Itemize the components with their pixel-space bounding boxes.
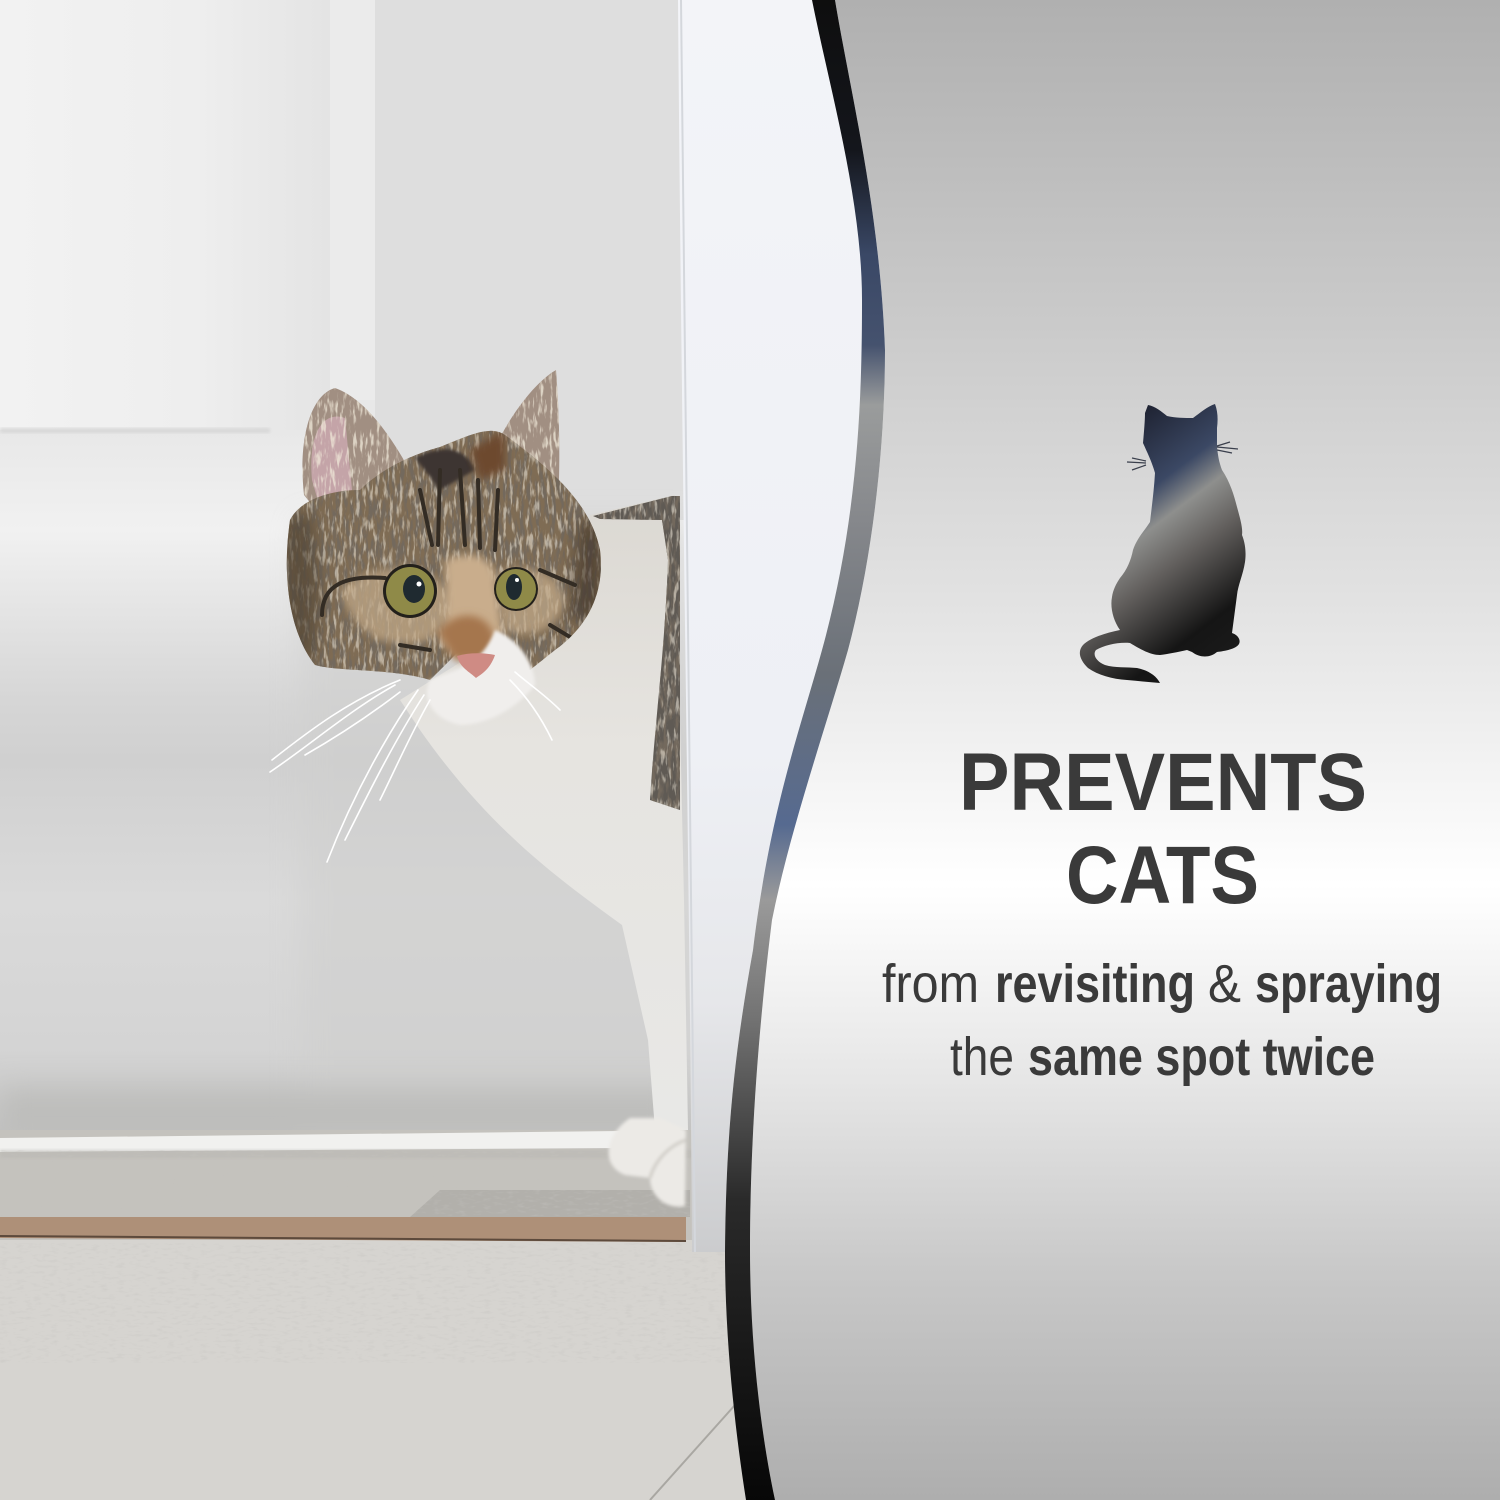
heading: prevents cats: PREVENTS: [959, 737, 1367, 828]
room background wall: [0, 0, 692, 1140]
cat body: [400, 495, 688, 1130]
cat face shading: [280, 510, 320, 660]
cat back tabby markings: [593, 496, 680, 810]
icon: cat silhouette: [1080, 404, 1246, 683]
floor and baseboard: [0, 1130, 780, 1500]
text block: from revisiting and spraying: from: [882, 954, 979, 1014]
cat muzzle: [427, 630, 535, 725]
cat ears: [302, 370, 560, 502]
cat left eye: [383, 564, 437, 618]
text block: from revisiting and spraying: &: [1208, 954, 1241, 1014]
cat nose: [457, 653, 495, 678]
text block: from revisiting and spraying: revisiting: [995, 954, 1195, 1014]
text block: from revisiting and spraying: same spot twice: [1028, 1027, 1375, 1087]
heading: prevents cats: CATS: [1066, 830, 1259, 921]
door frame: [678, 0, 862, 1252]
text block: from revisiting and spraying: [882, 954, 1442, 1087]
heading: prevents cats: [959, 737, 1367, 921]
cat paws: [609, 1118, 686, 1207]
cat right eye: [494, 567, 538, 611]
right grey gradient panel: [750, 0, 1500, 1500]
text block: from revisiting and spraying: the: [950, 1027, 1014, 1087]
cat head: [286, 430, 601, 680]
cat whiskers: [270, 672, 560, 862]
wavy dark stripe divider: [725, 0, 885, 1500]
text block: from revisiting and spraying: spraying: [1255, 954, 1442, 1014]
photo: tabby and white cat peeking around door: [270, 365, 688, 1207]
cat nose bridge: [438, 555, 505, 660]
